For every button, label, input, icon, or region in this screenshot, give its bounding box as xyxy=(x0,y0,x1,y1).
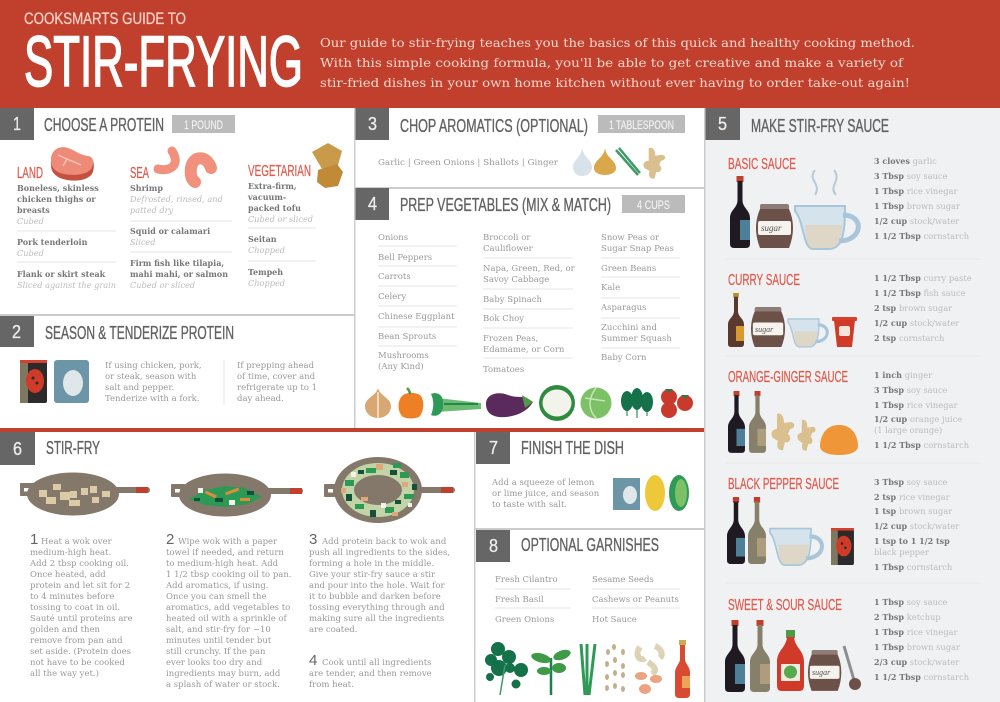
vegetable list column 2: Cauliflower xyxy=(483,244,534,254)
icon: hot sauce bottle xyxy=(675,640,690,698)
step 2 text: Once you can smell the xyxy=(166,592,267,602)
orange-ginger sauce: 1 1/2 Tbsp cornstarch xyxy=(874,440,970,450)
step number 5 xyxy=(705,108,740,140)
basic sauce: 1/2 cup stock/water xyxy=(874,216,959,226)
step 4 text: Cook until all ingredients xyxy=(322,658,431,668)
heading: choose a protein: CHOOSE A PROTEIN xyxy=(44,115,164,135)
step 1 text: remove from pan and xyxy=(30,636,123,646)
black pepper sauce: 1 tsp to 1 1/2 tsp xyxy=(874,536,950,546)
icon: lemon xyxy=(645,475,665,511)
icon: spinach xyxy=(621,388,653,418)
sweet and sour sauce: sugar xyxy=(812,668,831,677)
curry sauce xyxy=(728,272,972,347)
vegetable list column 1: Bean Sprouts xyxy=(378,332,436,342)
panel 5: make stir-fry sauce xyxy=(705,108,1000,702)
icon: celery xyxy=(431,393,481,416)
sweet and sour sauce: 1 1/2 Tbsp cornstarch xyxy=(874,672,970,682)
heading: prep vegetables: PREP VEGETABLES (MIX & MATCH) xyxy=(400,195,611,215)
basic sauce: 1 Tbsp brown sugar xyxy=(874,201,960,211)
step 2 text: ever looks too dry and xyxy=(166,658,263,668)
orange-ginger sauce: ORANGE-GINGER SAUCE xyxy=(728,369,848,386)
panel 4: prep vegetables xyxy=(355,188,693,421)
icon: tofu cubes xyxy=(312,143,343,188)
vegetable list column 1 xyxy=(378,233,457,372)
garnish list: Fresh Cilantro xyxy=(495,575,558,585)
icon: ginger xyxy=(643,148,665,179)
vegetable list column 3: Kale xyxy=(601,283,620,293)
basic sauce: 1 1/2 Tbsp cornstarch xyxy=(874,231,970,241)
step number 4: 4 xyxy=(368,194,377,214)
panel 7: finish the dish xyxy=(476,432,689,511)
step 2 text: heated oil with a sprinkle of xyxy=(166,614,288,624)
sweet and sour sauce xyxy=(725,597,970,692)
orange-ginger sauce: 3 Tbsp soy sauce xyxy=(874,385,948,395)
finishing text: or lime juice, and season xyxy=(492,489,600,499)
heading: optional garnishes: OPTIONAL GARNISHES xyxy=(521,535,659,555)
curry sauce: CURRY SAUCE xyxy=(728,272,800,289)
sweet and sour sauce: 2/3 cup stock/water xyxy=(874,657,959,667)
prep-ahead text: day ahead. xyxy=(237,394,284,404)
column: sea: patted dry xyxy=(130,205,174,215)
icon: onion xyxy=(365,388,391,418)
vegetable list column 1: Bell Peppers xyxy=(378,253,432,263)
step number 5: 5 xyxy=(718,114,727,134)
icon: bell pepper xyxy=(398,388,423,418)
panel 2: season and tenderize protein xyxy=(0,316,317,405)
curry sauce: 1 1/2 Tbsp fish sauce xyxy=(874,288,966,298)
column: land: Cubed xyxy=(17,216,44,226)
step 1 text: set aside. (Protein does xyxy=(30,646,131,657)
basic sauce: 3 cloves garlic xyxy=(874,156,937,166)
garnish list: Fresh Basil xyxy=(495,595,544,605)
garnish list: Cashews or Peanuts xyxy=(592,595,679,605)
icon: wok with food pushed to sides xyxy=(324,457,455,523)
vegetable list column 2 xyxy=(483,233,576,375)
icon: garlic xyxy=(573,148,592,176)
step 2 text: still crunchy. If the pan xyxy=(166,647,266,657)
vegetable list column 3: Green Beans xyxy=(601,264,656,274)
step 4 text xyxy=(309,652,432,690)
vegetable list column 1: Onions xyxy=(378,233,408,243)
step 1 text: protein and let sit for 2 xyxy=(30,581,130,591)
icon: shallot xyxy=(594,148,616,175)
column: sea: mahi mahi, or salmon xyxy=(130,269,228,279)
column: sea xyxy=(129,151,232,290)
column: vegetarian: packed tofu xyxy=(248,203,301,213)
prep-ahead text: refrigerate up to 1 xyxy=(237,383,317,393)
seasoning text: Tenderize with a fork. xyxy=(105,394,200,404)
heading: season and tenderize: SEASON & TENDERIZE PROTEIN xyxy=(45,323,234,343)
step number 3 xyxy=(355,108,389,140)
column: vegetarian: Seitan xyxy=(248,234,277,244)
sweet and sour sauce: 1 Tbsp brown sugar xyxy=(874,642,960,652)
column: sea: SEA xyxy=(130,165,149,182)
quantity tag: 1 pound: 1 POUND xyxy=(184,118,223,132)
step 2 text: ingredients may burn, add xyxy=(166,669,281,679)
step number 2 xyxy=(0,316,34,347)
column: vegetarian: vacuum- xyxy=(247,192,286,202)
column: vegetarian: Chopped xyxy=(248,278,285,288)
quantity tag: 4 cups xyxy=(622,195,685,213)
garnish list: Sesame Seeds xyxy=(592,575,654,585)
step 4 text: 4 xyxy=(309,652,317,669)
intro paragraph: With this simple cooking formula, you'll be able to get creative and make a variety of xyxy=(320,56,905,70)
icon: lime xyxy=(669,475,689,511)
step 2 text: a splash of water or stock. xyxy=(166,680,280,690)
title: STIR-FRYING xyxy=(24,23,303,102)
heading: make stir-fry sauce: MAKE STIR-FRY SAUCE xyxy=(751,116,889,136)
icon: cashews and peanuts xyxy=(635,646,662,694)
step 1 text: to 4 minutes before xyxy=(30,592,114,602)
column: sea: Cubed or sliced xyxy=(130,280,195,290)
step 3 text: Give your stir-fry sauce a stir xyxy=(309,570,436,580)
step 2 text: 2 xyxy=(166,531,174,548)
black pepper sauce: 1 Tbsp cornstarch xyxy=(874,562,953,572)
orange-ginger sauce: 1 Tbsp rice vinegar xyxy=(874,400,957,410)
finishing text: Add a squeeze of lemon xyxy=(491,478,595,488)
black pepper sauce: BLACK PEPPER SAUCE xyxy=(728,476,839,493)
vegetable list column 2: Napa, Green, Red, or xyxy=(483,264,576,274)
step 2 text: Add aromatics, if using. xyxy=(165,581,268,591)
step number 8: 8 xyxy=(489,536,498,556)
step number 1 xyxy=(0,108,34,140)
orange-ginger sauce: 1/2 cup orange juice xyxy=(874,414,962,424)
icon: eggplant xyxy=(486,393,533,417)
basic sauce: 1 Tbsp rice vinegar xyxy=(874,186,957,196)
column: sea: Squid or calamari xyxy=(130,226,210,236)
vegetable list column 3: Summer Squash xyxy=(601,334,672,344)
step 2 text: aromatics, add vegetables to xyxy=(166,603,290,613)
panel 3: chop aromatics xyxy=(355,108,685,179)
vegetable list column 2: Edamame, or Corn xyxy=(483,345,565,355)
step 2 text xyxy=(165,531,292,690)
seasoning text xyxy=(105,361,202,404)
heading: finish the dish: FINISH THE DISH xyxy=(521,438,624,458)
header banner xyxy=(0,0,1000,108)
icon: cabbage xyxy=(580,388,612,418)
basic sauce: sugar xyxy=(761,223,782,233)
vegetable list column 3: Zucchini and xyxy=(601,323,658,333)
seasoning text: If using chicken, pork, xyxy=(105,361,202,371)
step 3 text: forming a hole in the middle. xyxy=(309,559,434,569)
quantity tag: 1 pound xyxy=(172,115,235,133)
basic sauce: 3 Tbsp soy sauce xyxy=(874,171,948,181)
vegetable list column 2: Frozen Peas, xyxy=(483,334,538,344)
vegetable list column 2: Broccoli or xyxy=(483,233,531,243)
black pepper sauce xyxy=(727,476,959,572)
icon: wok with protein xyxy=(20,472,150,516)
column: land: Cubed xyxy=(17,248,44,258)
step 1 text: not have to be cooked xyxy=(30,658,125,668)
step 4 text: from heat. xyxy=(309,680,354,690)
icon: salt box xyxy=(613,478,640,510)
step 1 text: Once heated, add xyxy=(30,570,106,580)
step number 2: 2 xyxy=(12,322,21,342)
step number 1: 1 xyxy=(13,114,21,134)
vegetable list column 1: (Any Kind) xyxy=(378,361,424,372)
quantity tag: 1 tablespoon xyxy=(598,115,685,133)
black pepper sauce: black pepper xyxy=(874,547,929,557)
curry sauce: 2 tsp cornstarch xyxy=(874,333,945,343)
column: land xyxy=(17,147,116,290)
step 4 text: are tender, and then remove xyxy=(309,669,432,679)
quantity tag: 4 cups: 4 CUPS xyxy=(637,198,670,212)
seasoning text: or steak, season with xyxy=(105,372,197,382)
orange-ginger sauce xyxy=(728,369,970,455)
column: land: LAND xyxy=(17,165,43,182)
step 2 text: Wipe wok with a paper xyxy=(178,537,278,547)
panel 6: stir-fry xyxy=(0,432,455,690)
intro paragraph: Our guide to stir-frying teaches you the basics of this quick and healthy cooking method. xyxy=(320,36,915,50)
step 2 text: 1 1/2 tbsp cooking oil to pan. xyxy=(166,570,292,580)
step 2 text: minutes until tender but xyxy=(166,636,272,646)
icon: salt tin xyxy=(54,360,89,403)
heading: chop aromatics: CHOP AROMATICS (OPTIONAL) xyxy=(400,116,588,136)
step number 7: 7 xyxy=(489,438,498,458)
intro paragraph: stir-fried dishes in your own home kitchen without ever having to order take-out again! xyxy=(320,76,910,90)
column: land: breasts xyxy=(17,205,50,215)
step 1 text: golden and then xyxy=(30,625,101,635)
vegetable list column 3: Asparagus xyxy=(600,303,646,313)
sweet and sour sauce: 2 Tbsp ketchup xyxy=(874,612,941,622)
column: vegetarian: Extra-firm, xyxy=(248,181,297,191)
finishing text xyxy=(491,478,600,510)
step 1 text: tossing to coat in oil. xyxy=(30,603,120,613)
step 3 text: Add protein back to wok and xyxy=(321,537,447,547)
step number 8 xyxy=(476,530,510,562)
basic sauce xyxy=(728,156,970,249)
basic sauce: BASIC SAUCE xyxy=(728,156,796,173)
vegetable list column 3: Baby Corn xyxy=(601,353,647,363)
vegetable list column 1: Chinese Eggplant xyxy=(378,312,455,322)
column: vegetarian xyxy=(247,143,343,288)
vegetable list column 1: Carrots xyxy=(378,272,411,282)
step number 4 xyxy=(355,188,389,220)
step 2 text: to medium-high heat. Add xyxy=(166,559,279,569)
curry sauce: sugar xyxy=(755,325,774,334)
step 1 text: all the way yet.) xyxy=(30,668,99,679)
icon: steak xyxy=(51,147,94,181)
garnish list: Green Onions xyxy=(495,615,554,625)
step number 3: 3 xyxy=(368,114,377,134)
step 3 text: 3 xyxy=(309,531,317,548)
vegetable list column 3: Snow Peas or xyxy=(601,233,660,243)
curry sauce: 1 1/2 Tbsp curry paste xyxy=(874,273,972,283)
intro paragraph xyxy=(320,36,915,90)
step 1 text: 1 xyxy=(30,531,38,548)
step 3 text: are coated. xyxy=(309,625,357,635)
icon: pepper tin xyxy=(20,360,47,403)
black pepper sauce: 3 Tbsp soy sauce xyxy=(874,477,948,487)
heading: stir-fry: STIR-FRY xyxy=(46,438,100,458)
step 1 text: Sauté until proteins are xyxy=(30,613,133,624)
vegetable list column 2: Savoy Cabbage xyxy=(483,275,549,285)
garnish list xyxy=(495,575,680,625)
icon: cilantro xyxy=(485,642,528,695)
vegetable list column 3: Sugar Snap Peas xyxy=(601,244,674,254)
orange-ginger sauce: (1 large orange) xyxy=(874,425,942,435)
step 1 text: Add 2 tbsp cooking oil. xyxy=(29,559,129,569)
step number 6 xyxy=(0,432,35,465)
vegetable list column 2: Tomatoes xyxy=(483,365,524,375)
vegetable list column 2: Bok Choy xyxy=(483,314,524,324)
vegetable icons row xyxy=(365,385,693,421)
step number 7 xyxy=(476,432,510,464)
finishing text: to taste with salt. xyxy=(492,500,567,510)
sweet and sour sauce: SWEET & SOUR SAUCE xyxy=(728,597,842,614)
garnish list: Hot Sauce xyxy=(592,615,637,625)
icon: wok with vegetables xyxy=(171,474,303,516)
step 2 text: towel if needed, and return xyxy=(166,548,284,558)
icon: green onions xyxy=(616,148,640,175)
icon: green onions xyxy=(581,644,595,695)
step 3 text: push all ingredients to the sides, xyxy=(309,548,450,558)
curry sauce: 1/2 cup stock/water xyxy=(874,318,959,328)
vegetable list column 1: Mushrooms xyxy=(378,351,429,361)
step 1 text: medium-high heat. xyxy=(30,548,111,558)
sweet and sour sauce: 1 Tbsp soy sauce xyxy=(874,597,948,607)
column: land: Flank or skirt steak xyxy=(17,269,106,279)
black pepper sauce: 1 tsp brown sugar xyxy=(874,506,952,516)
column: sea: Shrimp xyxy=(130,183,163,193)
kicker: CookSmarts guide to: COOKSMARTS GUIDE TO xyxy=(24,9,186,28)
column: sea: Firm fish like tilapia, xyxy=(130,258,224,268)
icon: shrimp xyxy=(158,151,211,182)
aromatics list: Garlic | Green Onions | Shallots | Ginger xyxy=(378,158,559,168)
prep-ahead text: If prepping ahead xyxy=(237,361,315,371)
step 3 text: making sure all the ingredients xyxy=(309,614,444,624)
icon: basil xyxy=(530,648,572,695)
panel 1: choose a protein xyxy=(0,108,354,315)
orange-ginger sauce: 1 inch ginger xyxy=(874,370,932,380)
column: land: chicken thighs or xyxy=(17,194,96,204)
icon: tomatoes xyxy=(661,389,693,418)
vegetable list column 3 xyxy=(600,233,680,363)
column: land: Sliced against the grain xyxy=(17,280,116,290)
curry sauce: 2 tsp brown sugar xyxy=(874,303,952,313)
step 3 text xyxy=(309,531,450,635)
prep-ahead text xyxy=(237,361,317,404)
step 1 text xyxy=(29,531,133,679)
icon: sesame seeds xyxy=(605,644,625,692)
quantity tag: 1 tablespoon: 1 TABLESPOON xyxy=(609,118,674,132)
column: sea: Sliced xyxy=(130,237,156,247)
column: vegetarian: Tempeh xyxy=(248,267,283,277)
panel 8: optional garnishes xyxy=(476,530,690,698)
step number 6: 6 xyxy=(13,439,22,459)
column: vegetarian: Cubed or sliced xyxy=(248,214,313,224)
vegetable list column 2: Baby Spinach xyxy=(483,295,543,305)
step 3 text: and pour into the hole. Wait for xyxy=(309,581,445,591)
icon: cauliflower xyxy=(539,385,575,421)
sweet and sour sauce: 1 Tbsp rice vinegar xyxy=(874,627,957,637)
seasoning text: salt and pepper. xyxy=(105,383,174,393)
column: land: Pork tenderloin xyxy=(17,237,88,247)
prep-ahead text: of time, cover and xyxy=(237,372,316,382)
step 3 text: tossing everything through and xyxy=(309,603,445,613)
column: vegetarian: VEGETARIAN xyxy=(248,163,311,180)
black pepper sauce: 2 tsp rice vinegar xyxy=(874,492,950,502)
step 3 text: it to bubble and darken before xyxy=(309,592,441,602)
column: sea: Defrosted, rinsed, and xyxy=(129,194,223,204)
step 2 text: salt, and stir-fry for ~10 xyxy=(166,625,271,635)
black pepper sauce: 1/2 cup stock/water xyxy=(874,521,959,531)
vegetable list column 1: Celery xyxy=(378,292,406,302)
column: land: Boneless, skinless xyxy=(17,183,99,193)
step 1 text: Heat a wok over xyxy=(41,537,113,547)
column: vegetarian: Chopped xyxy=(248,245,285,255)
